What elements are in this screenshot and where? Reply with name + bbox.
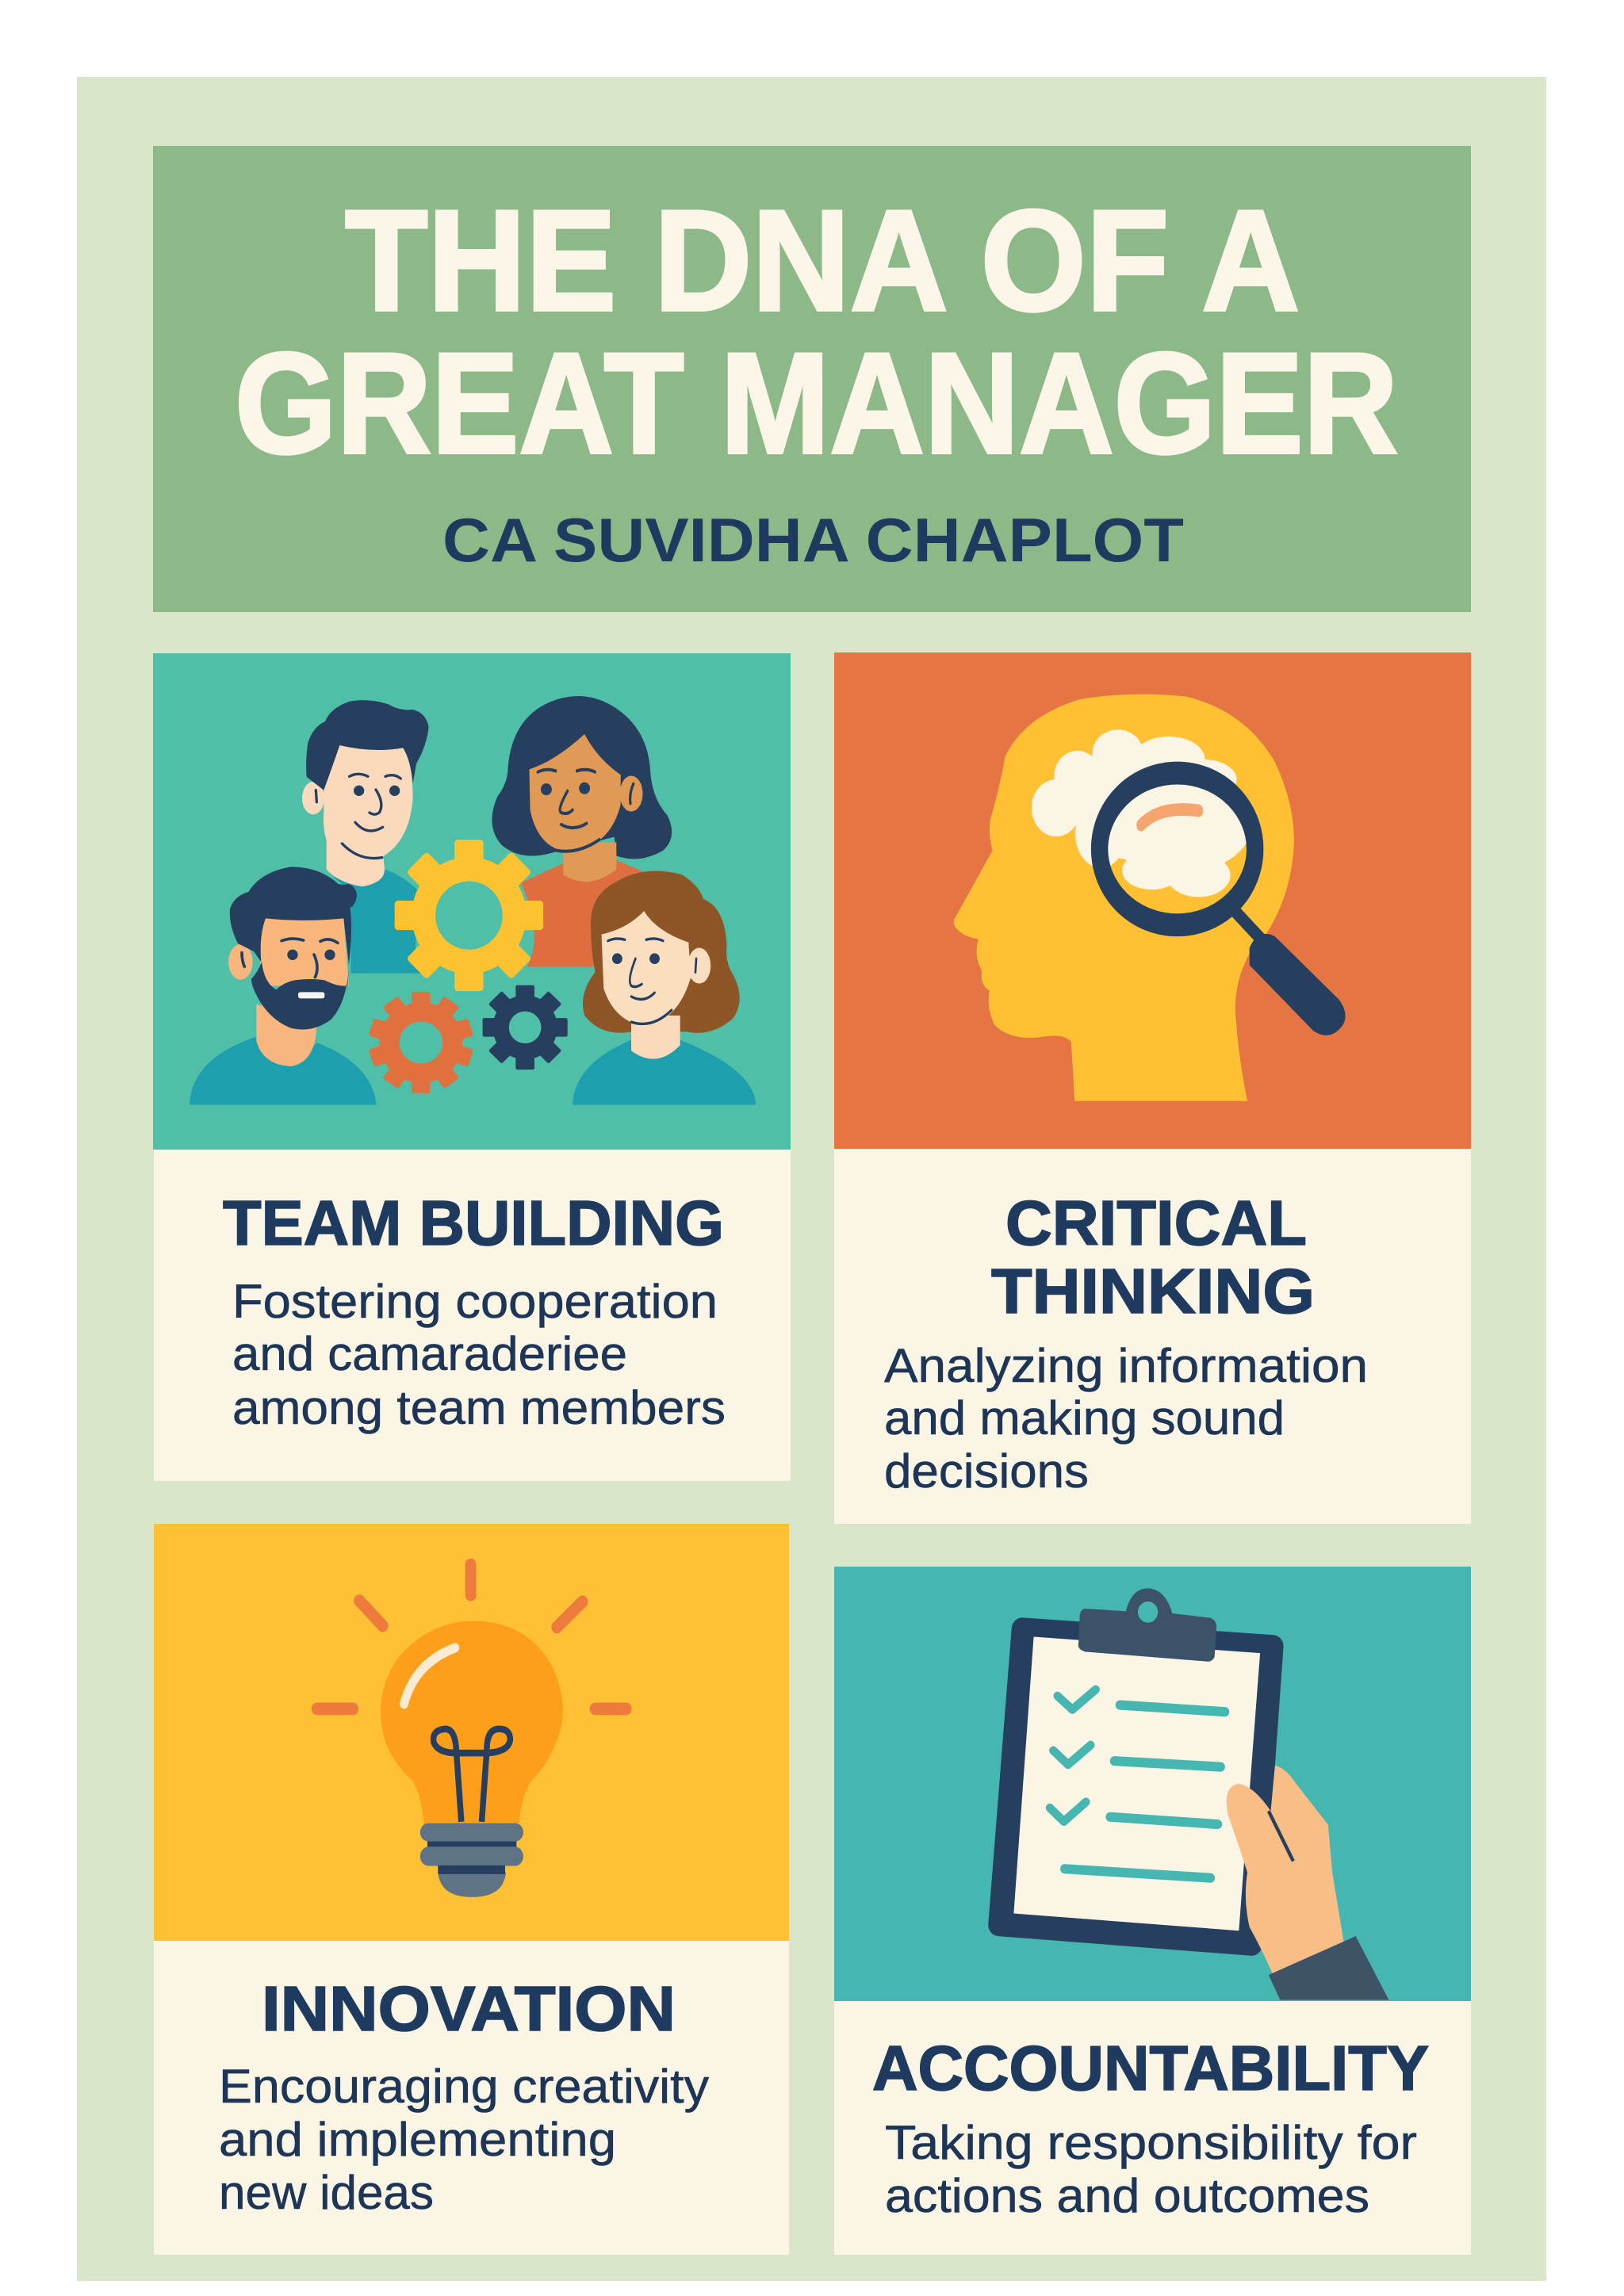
description: team building: among team members xyxy=(232,1381,726,1434)
checklist xyxy=(1050,1689,1225,1878)
description: innovation: new ideas xyxy=(219,2166,434,2219)
description: accountability: Taking responsibility for xyxy=(885,2116,1417,2169)
description: accountability xyxy=(885,2116,1417,2222)
head silhouette xyxy=(954,695,1294,1101)
header banner xyxy=(153,146,1471,612)
heading: accountability: ACCOUNTABILITY xyxy=(872,2033,1429,2103)
description: critical thinking xyxy=(884,1339,1368,1498)
title: GREAT MANAGER xyxy=(235,323,1398,484)
person: bearded man head xyxy=(228,867,357,1066)
heading: critical thinking: CRITICAL xyxy=(1005,1188,1307,1258)
person: woman bottom right xyxy=(573,871,756,1104)
icon: clipboard held by hand xyxy=(999,1588,1388,2000)
description: team building: and camaraderiee xyxy=(232,1327,627,1380)
clipboard board and paper xyxy=(999,1629,1273,1944)
heading: critical thinking xyxy=(991,1188,1315,1326)
description: innovation: and implementing xyxy=(219,2113,616,2166)
description: team building: Fostering cooperation xyxy=(232,1275,718,1328)
description: team building xyxy=(232,1275,726,1434)
person: man top left body xyxy=(334,870,425,974)
icon: head with magnifying glass xyxy=(954,695,1346,1101)
filament xyxy=(434,1729,510,1822)
icon: navy gear xyxy=(483,985,568,1070)
icon: orange gear xyxy=(369,992,473,1093)
hand xyxy=(1227,1766,1388,2000)
person: man top left head xyxy=(302,700,429,886)
icon: large yellow gear xyxy=(395,840,543,991)
description: innovation: Encouraging creativity xyxy=(219,2060,709,2113)
magnifying glass xyxy=(1100,773,1346,1035)
panel: innovation xyxy=(154,1524,789,2255)
heading: innovation: INNOVATION xyxy=(262,1973,676,2044)
person: bearded man body xyxy=(190,1037,377,1104)
bulb base xyxy=(420,1823,523,1897)
person: woman top right xyxy=(492,696,672,966)
description: critical thinking: and making sound xyxy=(884,1391,1285,1445)
description: critical thinking: Analyzing information xyxy=(884,1339,1368,1392)
panel: team building xyxy=(153,653,791,1481)
panel: accountability xyxy=(834,1567,1471,2255)
description: innovation xyxy=(219,2060,709,2219)
panel: critical thinking xyxy=(834,652,1471,1524)
icon: light bulb xyxy=(317,1565,626,1897)
heading: critical thinking: THINKING xyxy=(991,1256,1315,1326)
description: accountability: actions and outcomes xyxy=(885,2169,1369,2222)
heading: team building: TEAM BUILDING xyxy=(223,1188,724,1258)
clip xyxy=(1078,1588,1216,1662)
icon: team of four people with gears xyxy=(190,696,756,1104)
title xyxy=(235,181,1398,484)
brain xyxy=(1032,729,1251,897)
light rays xyxy=(317,1565,626,1709)
bulb glass xyxy=(381,1621,563,1827)
description: critical thinking: decisions xyxy=(884,1445,1089,1498)
subtitle: author: CA SUVIDHA CHAPLOT xyxy=(442,505,1184,575)
title: THE DNA OF A xyxy=(345,181,1300,341)
